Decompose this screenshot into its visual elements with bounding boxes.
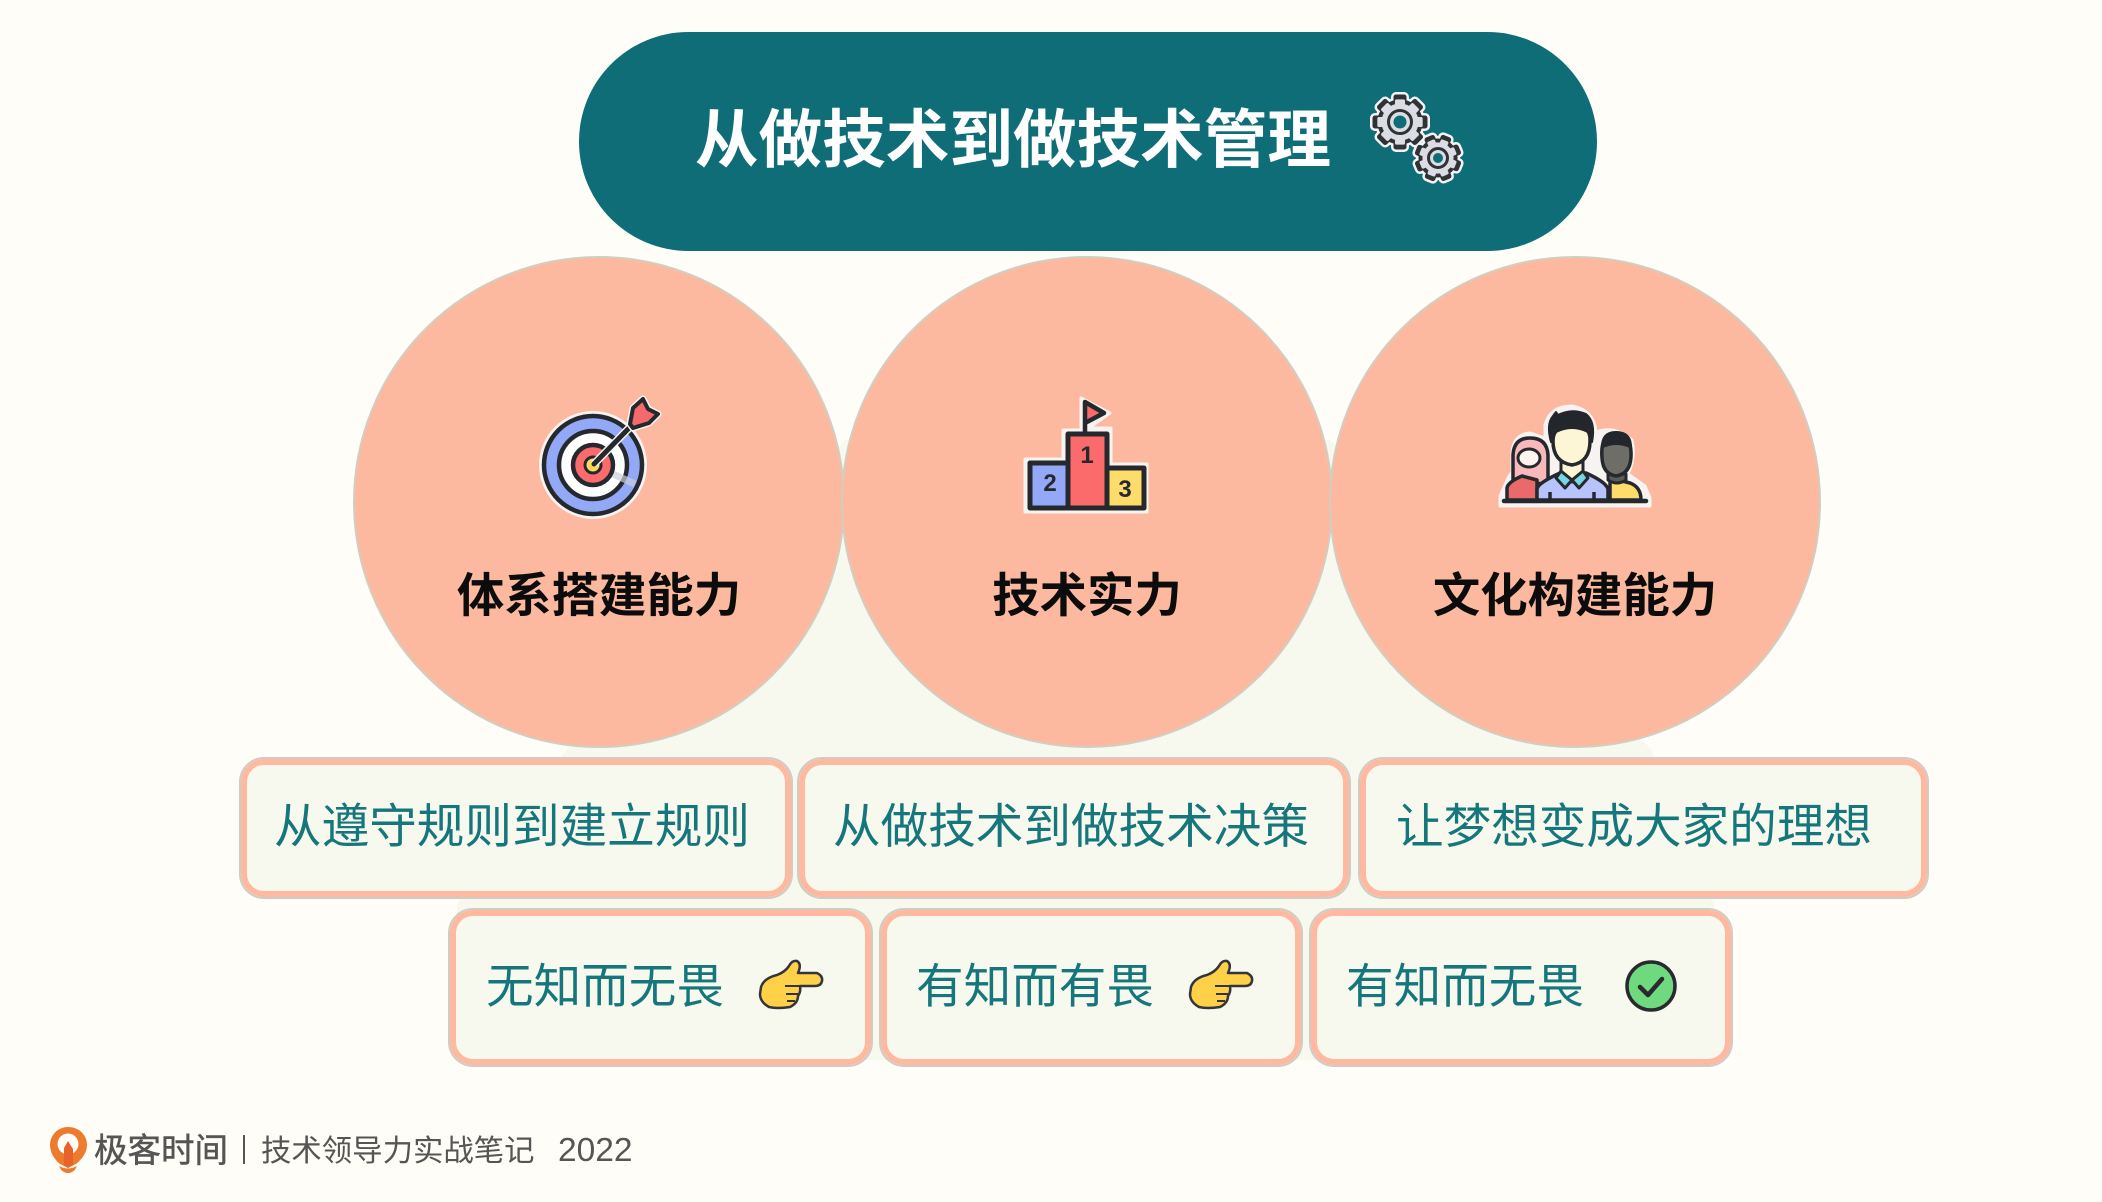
callout: ignorant and fearless: 无知而无畏	[486, 961, 724, 1014]
footer caption: 技术领导力实战笔记	[261, 1134, 535, 1168]
callout: from following rules to building rules	[240, 758, 792, 898]
circle label: 体系搭建能力	[457, 570, 741, 623]
title banner	[579, 32, 1597, 251]
callout: knowledgeable and fearful	[880, 909, 1302, 1066]
podium numbers: 2	[1043, 470, 1057, 497]
callout: ignorant and fearless	[449, 909, 872, 1066]
circle label: 文化构建能力	[1433, 570, 1717, 623]
icon: pointing hand	[760, 961, 822, 1008]
icon: gears	[1373, 95, 1468, 188]
podium numbers: 1	[1080, 442, 1094, 469]
callout: make the dream everyone's ideal	[1359, 758, 1928, 898]
icon: green check	[1627, 962, 1675, 1010]
callout: make the dream everyone's ideal: 让梦想变成大家的理想	[1396, 801, 1872, 854]
podium numbers	[1043, 442, 1132, 503]
footer	[50, 1127, 633, 1173]
title text: 从做技术到做技术管理	[695, 105, 1331, 176]
icon: target with arrow	[539, 399, 658, 519]
separator	[243, 1135, 245, 1164]
footer year: 2022	[558, 1132, 633, 1169]
brand name: 极客时间	[94, 1133, 228, 1170]
circle label: 技术实力	[992, 570, 1182, 623]
icon: logo	[50, 1127, 87, 1173]
podium numbers: 3	[1118, 476, 1132, 503]
callout: from doing tech to tech decisions: 从做技术到做技术决策	[833, 801, 1309, 854]
icon: three people	[1500, 406, 1650, 506]
callout: knowledgeable and fearless	[1310, 909, 1732, 1066]
callout: knowledgeable and fearless: 有知而无畏	[1346, 961, 1584, 1014]
icon: pointing hand	[1190, 961, 1252, 1008]
panel: system building circle	[354, 257, 844, 747]
callout: knowledgeable and fearful: 有知而有畏	[916, 961, 1154, 1014]
callout: from following rules to building rules: 从遵守规则到建立规则	[274, 801, 750, 854]
icon: podium with flag	[1025, 398, 1147, 512]
panel: technical strength circle	[842, 257, 1332, 747]
callout: from doing tech to tech decisions	[798, 758, 1350, 898]
panel: culture building circle	[1330, 257, 1820, 747]
